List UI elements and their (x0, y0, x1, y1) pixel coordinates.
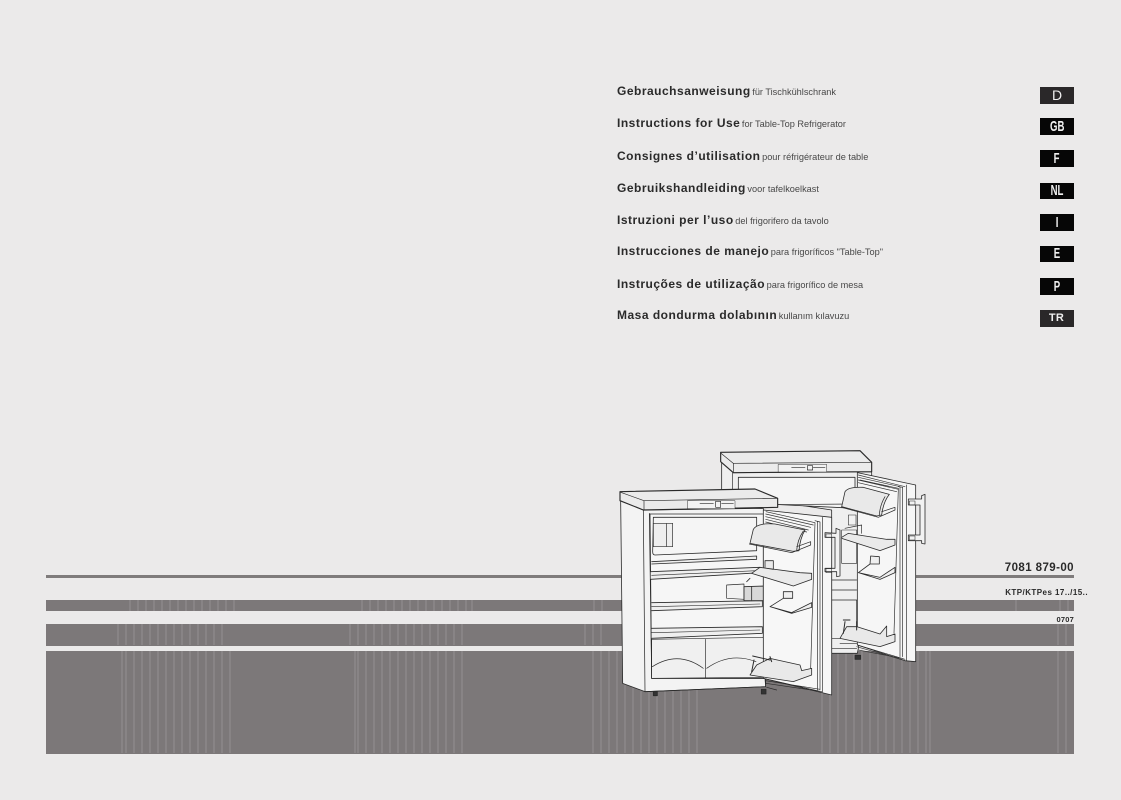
badge GB (1040, 118, 1074, 135)
back fridge control panel (778, 464, 827, 472)
model number: KTP/KTPes 17../15.. (1005, 588, 1088, 597)
badge P: P (1054, 278, 1060, 295)
badge P (1040, 278, 1074, 295)
badge I (1040, 214, 1074, 231)
horizontal rule band (46, 574, 1074, 578)
back fridge top (721, 451, 872, 473)
interior shelves (651, 556, 762, 638)
illustration: two open table-top refrigerators (619, 450, 926, 696)
bottles (727, 584, 744, 599)
title: Spanish: Instrucciones de manejo para frigoríficos "Table-Top" (617, 244, 883, 258)
freezer compartment (653, 517, 757, 555)
heading list: product titles per language (617, 84, 883, 322)
badge TR: TR (1049, 312, 1064, 324)
front fridge side edge (643, 510, 652, 692)
front fridge crisper cover (750, 524, 805, 551)
title: Portuguese: Instruções de utilização para frigorífico de mesa (617, 277, 863, 291)
front fridge handle (825, 528, 840, 577)
badge D (1040, 87, 1074, 104)
back fridge body (722, 462, 872, 653)
back fridge interior (738, 477, 855, 508)
door top grille (766, 514, 813, 532)
badge I: I (1056, 214, 1058, 231)
title: German: Gebrauchsanweisung für Tischkühlschrank (617, 84, 836, 98)
part number: 7081 879-00 (1005, 562, 1074, 574)
grey band 4 (46, 650, 1074, 754)
title: Turkish: Masa dondurma dolabının kullanım kılavuzu (617, 308, 849, 322)
title: Italian: Istruzioni per l’uso del frigorifero da tavolo (617, 213, 829, 227)
front fridge control panel (688, 501, 735, 509)
badge F: F (1054, 150, 1060, 167)
front refrigerator (620, 489, 840, 696)
back fridge foot (855, 655, 861, 659)
language badges (1040, 87, 1074, 327)
badge NL (1040, 183, 1074, 199)
back refrigerator (721, 451, 925, 662)
front fridge door (763, 510, 832, 695)
badge E: E (1054, 245, 1060, 262)
badge NL: NL (1051, 182, 1063, 199)
front fridge feet (653, 689, 766, 696)
date code: 0707 (1056, 615, 1074, 624)
front fridge top (620, 489, 778, 510)
title: Dutch: Gebruikshandleiding voor tafelkoelkast (617, 181, 819, 195)
badge D: D (1052, 87, 1062, 103)
badge GB: GB (1050, 118, 1064, 135)
back fridge handle (908, 494, 925, 544)
badge TR (1040, 310, 1074, 327)
title: French: Consignes d’utilisation pour réfrigérateur de table (617, 149, 868, 163)
back fridge door (857, 473, 916, 662)
front door shelves (752, 561, 812, 586)
back fridge door shelves (842, 533, 895, 551)
grey band 2 (46, 600, 1074, 611)
bottom sill (645, 678, 766, 692)
front fridge body (621, 501, 766, 692)
badge E (1040, 246, 1074, 262)
crisper drawers (652, 637, 763, 678)
freezer flap (653, 523, 673, 547)
back fridge crisper cover (842, 487, 889, 516)
grey band 3 (46, 624, 1074, 646)
badge F (1040, 150, 1074, 167)
title: English: Instructions for Use for Table-Top Refrigerator (617, 116, 846, 130)
front fridge interior (650, 514, 763, 678)
